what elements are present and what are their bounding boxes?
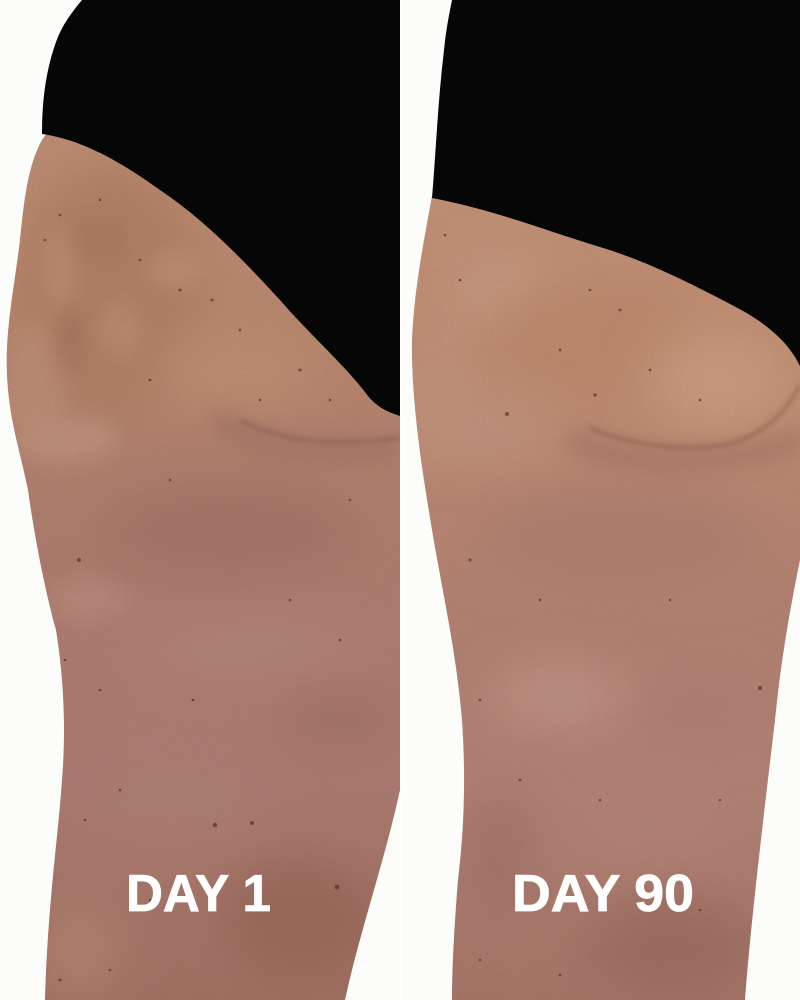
skin: day 1 thigh: [0, 100, 400, 1000]
panel: day 90 photo: [402, 0, 800, 1000]
skin spots: day 1: [44, 199, 351, 982]
skin spots: day 90: [444, 234, 762, 976]
garment: day 1: [42, 0, 400, 416]
buttock crease: day 90: [590, 385, 800, 447]
garment: day 90: [432, 0, 800, 366]
label: day 1: DAY 1: [126, 865, 271, 923]
skin grain: day 1: [0, 100, 400, 1000]
divider: [400, 0, 402, 1000]
panel: day 1 photo: [0, 0, 400, 1000]
label: day 90: DAY 90: [512, 865, 694, 923]
skin grain: day 90: [402, 150, 800, 1000]
buttock crease: day 1: [240, 420, 400, 442]
skin: day 90 thigh: [402, 150, 800, 1000]
